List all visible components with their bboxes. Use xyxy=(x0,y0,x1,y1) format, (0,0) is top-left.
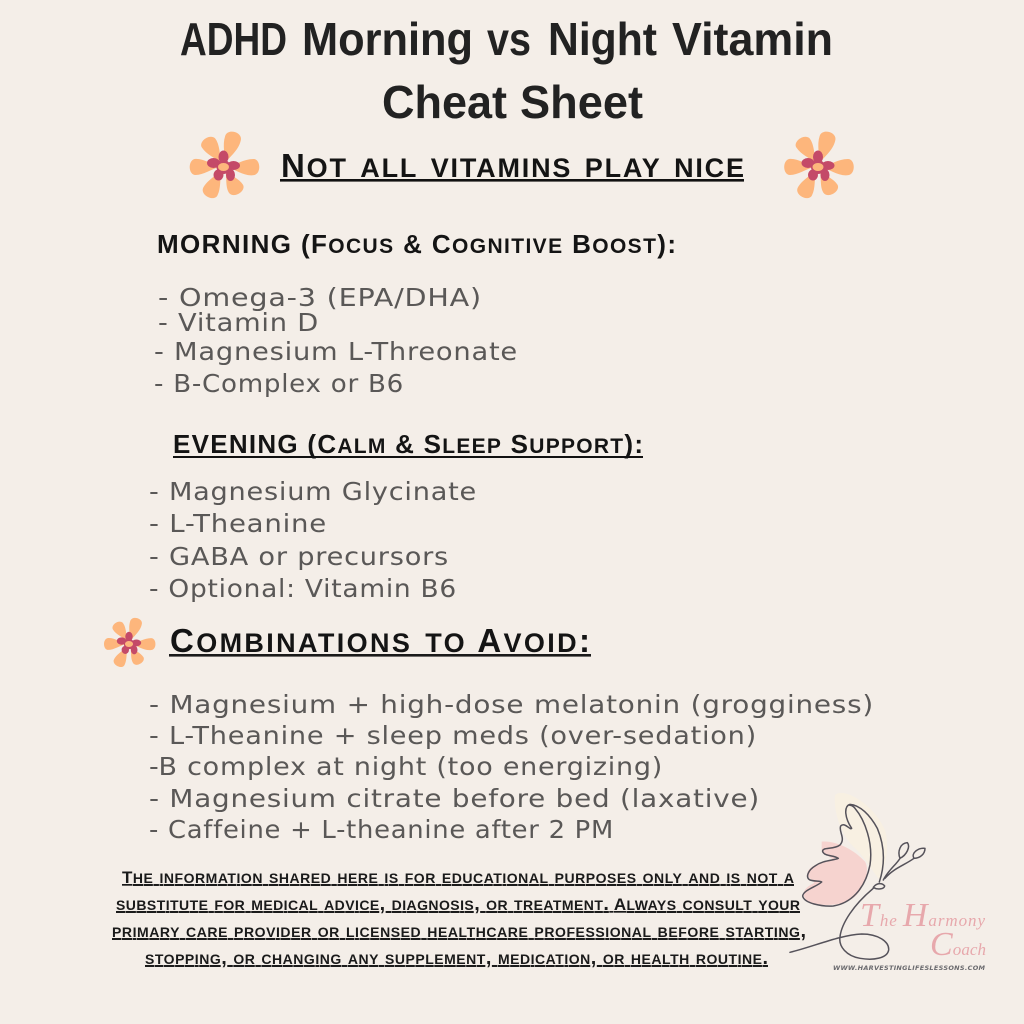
title: Sheet xyxy=(520,76,643,128)
morning heading: MORNING (Focus & Cognitive Boost): xyxy=(157,226,676,260)
logo website: WWW.HARVESTINGLIFESLESSONS.COM xyxy=(833,964,986,972)
evening list: - GABA or precursors xyxy=(149,542,449,571)
subtitle: Not all vitamins play nice xyxy=(281,143,744,186)
evening list: - Magnesium Glycinate xyxy=(149,477,477,506)
disclaimer: stopping, or changing any supplement, medication, or health routine. xyxy=(145,947,768,969)
title: Cheat xyxy=(382,76,507,128)
icon: flower right of subtitle xyxy=(784,130,854,201)
title: Night xyxy=(548,13,657,65)
evening list: - L-Theanine xyxy=(149,509,327,538)
disclaimer: substitute for medical advice, diagnosis, or treatment. Always consult your xyxy=(116,893,800,915)
evening list: - Optional: Vitamin B6 xyxy=(149,574,457,603)
combinations list: - Magnesium + high-dose melatonin (grogginess) xyxy=(149,690,874,719)
disclaimer: primary care provider or licensed healthcare professional before starting, xyxy=(112,920,806,942)
combinations list: - L-Theanine + sleep meds (over-sedation) xyxy=(149,721,757,750)
morning list: - Magnesium L-Threonate xyxy=(154,337,518,366)
evening heading: EVENING (Calm & Sleep Support): xyxy=(173,426,643,460)
title: ADHD xyxy=(180,13,287,65)
disclaimer xyxy=(112,866,806,969)
logo script text: The Harmony xyxy=(860,897,985,934)
combinations list: -B complex at night (too energizing) xyxy=(149,752,663,781)
title xyxy=(180,13,833,128)
logo script text second line: Coach xyxy=(930,926,986,963)
combinations list: - Caffeine + L-theanine after 2 PM xyxy=(149,815,614,844)
morning list: - Vitamin D xyxy=(158,308,319,337)
combinations list xyxy=(149,690,874,844)
morning list xyxy=(154,283,518,398)
icon: flower beside combinations heading xyxy=(104,616,155,669)
evening list xyxy=(149,477,477,603)
morning list: - B-Complex or B6 xyxy=(154,369,404,398)
combinations list: - Magnesium citrate before bed (laxative) xyxy=(149,784,760,813)
icon: flower left of subtitle xyxy=(190,130,259,201)
title: Morning xyxy=(302,13,473,65)
combinations heading: Combinations to Avoid: xyxy=(170,618,590,661)
morning list: - Omega-3 (EPA/DHA) xyxy=(158,283,482,312)
logo: The Harmony Coach butterfly xyxy=(790,793,986,972)
title: vs xyxy=(487,13,531,65)
title: Vitamin xyxy=(672,13,833,65)
disclaimer: The information shared here is for educational purposes only and is not a xyxy=(122,866,794,888)
